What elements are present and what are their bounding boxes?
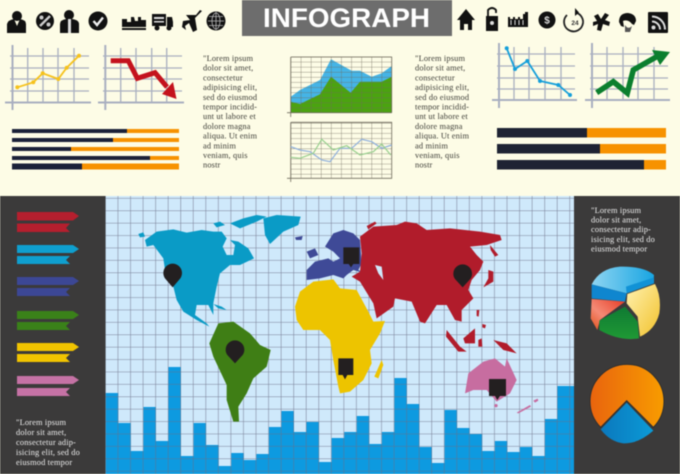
- text block: left: "Lorem ipsum: [203, 54, 253, 63]
- pin: europe: [343, 247, 359, 267]
- pin: north america: [163, 264, 182, 287]
- text block: center right: dolore magna: [415, 122, 463, 131]
- continents: [138, 215, 538, 422]
- text block: left: veniam, quis: [203, 151, 248, 160]
- text block: sidebar: dolor sit amet,: [16, 428, 66, 437]
- pin: asia: [453, 264, 472, 287]
- text block: center right: unt ut labore et: [415, 112, 468, 121]
- text block: sidebar: eiusmod tempor: [591, 244, 647, 254]
- icon: headset person: [619, 13, 636, 32]
- icon: factory: [508, 12, 528, 27]
- text block: center right: "Lorem ipsum: [415, 54, 465, 63]
- line chart: yellow: [5, 45, 91, 110]
- line chart: red falling arrow: [98, 45, 184, 110]
- ribbon: purple: [17, 277, 79, 296]
- text block: sidebar: "Lorem ipsum: [16, 418, 66, 427]
- text block: sidebar: dolor sit amet,: [591, 216, 641, 224]
- text block: center right: dolor sit amet,: [415, 64, 465, 73]
- australia: [465, 358, 538, 413]
- pie chart: 3d: [591, 267, 660, 339]
- title banner: [242, 0, 452, 36]
- icons: right row: [457, 8, 668, 33]
- panel: right sidebar: [574, 196, 680, 474]
- africa: [295, 279, 385, 393]
- pie chart: orange and blue: [590, 364, 664, 443]
- text block: sidebar: consectetur adip-: [591, 225, 651, 234]
- icon: check badge: [88, 12, 108, 30]
- text block: left: [203, 54, 258, 170]
- stacked bars: right: [497, 128, 666, 170]
- multi-line chart: [287, 122, 392, 182]
- area chart: [287, 57, 392, 117]
- text block: left: tempor incidid-: [203, 102, 257, 112]
- europe: [295, 230, 365, 280]
- text block: sidebar: [16, 418, 80, 467]
- title banner: INFOGRAPH: [263, 3, 430, 33]
- text block: center right: sed do eiusmod: [415, 93, 470, 102]
- stacked bars: left: [12, 129, 179, 170]
- text block: sidebar: isicing elit, sed do: [591, 235, 655, 244]
- icon: home: [457, 9, 475, 30]
- icon: open padlock: [486, 8, 498, 31]
- bar chart: skyline: [106, 367, 575, 474]
- text block: left: nostr: [203, 161, 221, 170]
- text block: center right: [415, 54, 470, 170]
- text block: center right: adipisicing elit,: [415, 83, 469, 92]
- icon: dollar badge: $: [544, 16, 550, 26]
- pin: south america: [226, 340, 244, 363]
- icon: truck: [152, 14, 173, 30]
- text block: sidebar: [591, 206, 655, 254]
- asia: [352, 222, 517, 353]
- ribbon: green: [17, 311, 79, 330]
- text block: sidebar: isicing elit, sed do: [16, 448, 80, 457]
- panel: world map: [105, 196, 575, 474]
- panel: left sidebar: [0, 196, 106, 474]
- text block: center right: nostr: [415, 161, 433, 170]
- icon: percent badge: [36, 12, 54, 30]
- text block: left: unt ut labore et: [203, 112, 256, 121]
- text block: left: aliqua. Ut enim: [203, 132, 257, 141]
- icon: dollar badge: [538, 12, 556, 28]
- pin: australia: [489, 379, 506, 400]
- ribbon: yellow: [17, 343, 79, 362]
- icons: left row: [7, 10, 226, 33]
- icon: globe: [206, 12, 226, 30]
- ribbon: pink: [17, 376, 79, 396]
- icon: person with tie: [60, 10, 79, 33]
- text block: sidebar: "Lorem ipsum: [591, 206, 641, 215]
- caspian hole: [375, 265, 383, 280]
- icon: 24h arrow: 24: [571, 20, 579, 27]
- text block: left: dolore magna: [203, 122, 251, 131]
- pin: africa: [338, 358, 353, 379]
- line chart: green rising arrow: [585, 43, 670, 108]
- text block: sidebar: eiusmod tempor: [16, 458, 72, 467]
- text block: left: consectetur: [203, 73, 243, 82]
- line chart: blue: [492, 43, 577, 108]
- icon: 24h arrow: [564, 8, 583, 31]
- text block: center right: aliqua. Ut enim: [415, 132, 469, 141]
- text block: center right: ad minim: [415, 141, 448, 150]
- text block: center right: tempor incidid-: [415, 102, 469, 112]
- north america: [138, 215, 301, 327]
- icon: plane: [182, 10, 202, 32]
- ribbon: blue: [17, 245, 79, 264]
- icon: factory train: [122, 17, 146, 30]
- text block: left: sed do eiusmod: [203, 93, 258, 102]
- text block: left: dolor sit amet,: [203, 64, 253, 73]
- text block: center right: consectetur: [415, 73, 455, 82]
- ribbon: red: [17, 212, 79, 232]
- text block: left: adipisicing elit,: [203, 83, 257, 92]
- text block: sidebar: consectetur adip-: [16, 438, 76, 447]
- south america: [209, 322, 271, 422]
- icon: person: [7, 11, 26, 33]
- text block: left: ad minim: [203, 141, 236, 150]
- icon: tools: [593, 13, 610, 31]
- icon: rss: [648, 12, 668, 33]
- map pins: [163, 247, 506, 400]
- text block: center right: veniam, quis: [415, 151, 460, 160]
